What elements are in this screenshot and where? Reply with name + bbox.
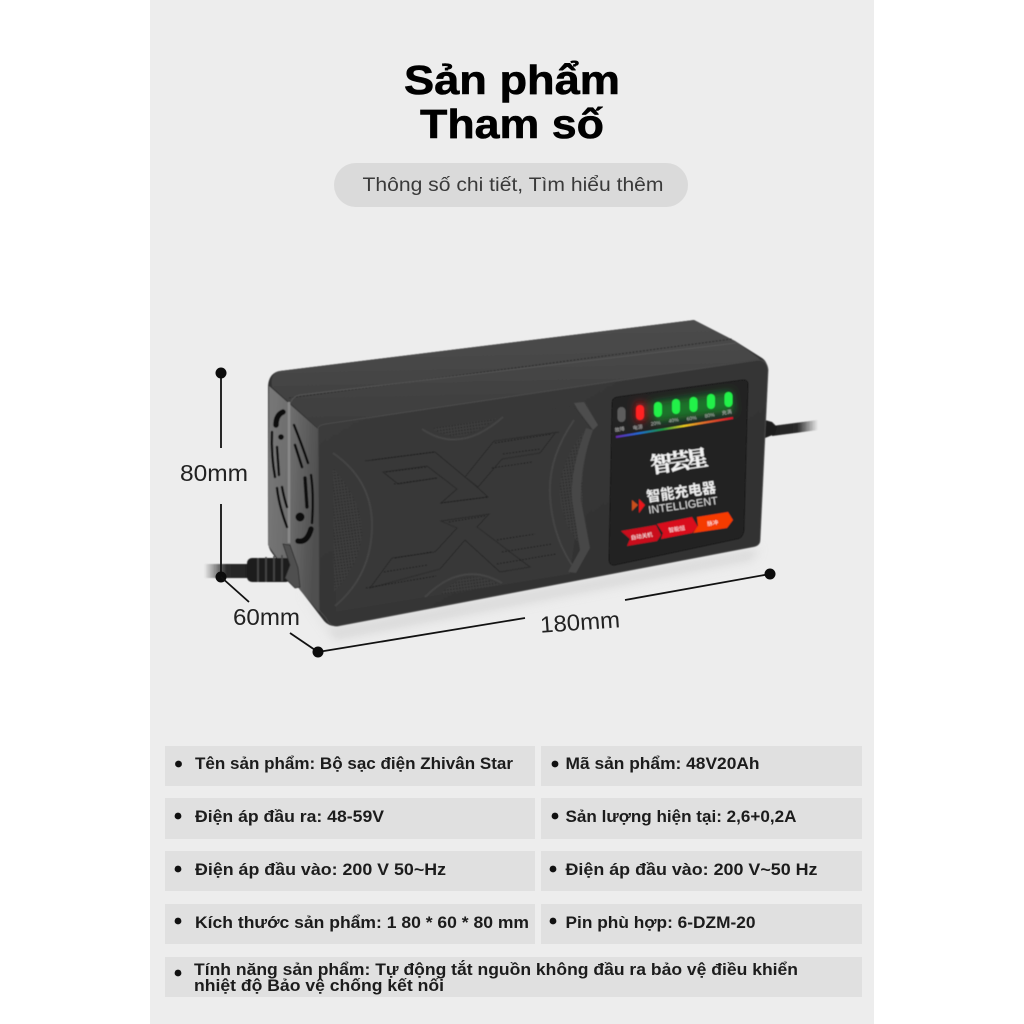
top face bbox=[272, 320, 760, 428]
spec: features bbox=[165, 957, 862, 997]
product label bbox=[645, 478, 719, 517]
vent slots rear bbox=[272, 412, 287, 527]
status LEDs bbox=[618, 392, 732, 422]
X emboss lines bbox=[365, 432, 559, 588]
LED labels: 故障 bbox=[614, 425, 625, 434]
divider bar bbox=[574, 402, 598, 430]
dotted emboss bbox=[366, 434, 556, 588]
dimension: depth 60mm: 60mm bbox=[233, 604, 300, 630]
feature ribbons: 脉冲 bbox=[707, 518, 719, 528]
spec: product code: Mã sản phẩm: 48V20Ah bbox=[566, 755, 760, 773]
LED labels: 60% bbox=[686, 415, 698, 423]
spec: battery bbox=[541, 904, 862, 944]
dimension: length 180mm: 180mm bbox=[539, 606, 621, 638]
product image: charger bbox=[204, 320, 818, 640]
LED labels bbox=[614, 408, 732, 434]
feature ribbons: 自动关机 bbox=[630, 530, 654, 542]
left output cable bbox=[204, 555, 291, 582]
LED labels: 充满 bbox=[721, 408, 732, 417]
LED glow bbox=[636, 392, 734, 422]
vent slots front bbox=[294, 425, 313, 541]
cable mounting plate bbox=[283, 544, 300, 588]
embossed X plate bbox=[332, 402, 598, 612]
seam on top bbox=[289, 339, 732, 398]
dimension: length 180mm bbox=[312, 568, 776, 658]
spec: output current bbox=[541, 798, 862, 839]
dimension: height 80mm bbox=[180, 368, 248, 582]
spec: dimensions: Kích thước sản phẩm: 1 80 * 60 * 80 mm bbox=[195, 914, 529, 932]
side face with vents bbox=[268, 386, 319, 612]
display panel bbox=[609, 380, 748, 565]
dimension: height 80mm: 80mm bbox=[180, 460, 248, 486]
rainbow line bbox=[616, 418, 733, 437]
spec: battery: Pin phù hợp: 6-DZM-20 bbox=[566, 914, 756, 932]
spec table bbox=[165, 746, 862, 997]
spec: product code bbox=[541, 746, 862, 786]
spec: dimensions bbox=[165, 904, 535, 944]
arcs bbox=[333, 417, 574, 606]
spec: product name: Tên sản phẩm: Bộ sạc điện Zhivân Star bbox=[195, 755, 514, 773]
product label: 智能充电器 bbox=[645, 478, 718, 506]
title: Sản phẩm bbox=[404, 57, 620, 103]
LED labels: 80% bbox=[704, 412, 716, 420]
spec: input voltage left: Điện áp đầu vào: 200 V 50~Hz bbox=[195, 861, 446, 879]
subtitle pill bbox=[334, 163, 688, 207]
spec: input voltage right bbox=[541, 851, 862, 891]
feature ribbons: 智能恒 bbox=[668, 524, 686, 534]
feature ribbons bbox=[621, 512, 733, 546]
title: Tham số bbox=[420, 101, 604, 147]
spec: features: Tính năng sản phẩm: Tự động tắt nguồn không đầu ra bảo vệ điều khiển bbox=[194, 960, 798, 979]
product label: INTELLIGENT bbox=[648, 495, 719, 517]
subtitle pill: Thông số chi tiết, Tìm hiểu thêm bbox=[362, 175, 664, 196]
red arrows bbox=[632, 499, 645, 513]
rear housing bbox=[268, 320, 768, 626]
spec: input voltage right: Điện áp đầu vào: 200 V~50 Hz bbox=[566, 861, 818, 879]
front face bbox=[318, 360, 768, 626]
spec: input voltage left bbox=[165, 851, 535, 891]
spec: product name bbox=[165, 746, 535, 786]
speaker meshes bbox=[333, 468, 362, 592]
title bbox=[404, 57, 620, 147]
brand name: 智芸星 bbox=[648, 441, 710, 480]
LED labels: 20% bbox=[650, 420, 662, 428]
spec: output voltage: Điện áp đầu ra: 48-59V bbox=[195, 808, 384, 826]
spec: features: nhiệt độ Bảo vệ chống kết nối bbox=[194, 977, 444, 995]
LED labels: 电源 bbox=[632, 423, 643, 432]
right power cable bbox=[765, 420, 818, 438]
LED labels: 40% bbox=[668, 417, 680, 425]
dimension: depth 60mm bbox=[221, 577, 318, 652]
spec: output voltage bbox=[165, 798, 535, 839]
spec: output current: Sản lượng hiện tại: 2,6+0,2A bbox=[566, 808, 797, 826]
floor shadow bbox=[300, 548, 760, 640]
